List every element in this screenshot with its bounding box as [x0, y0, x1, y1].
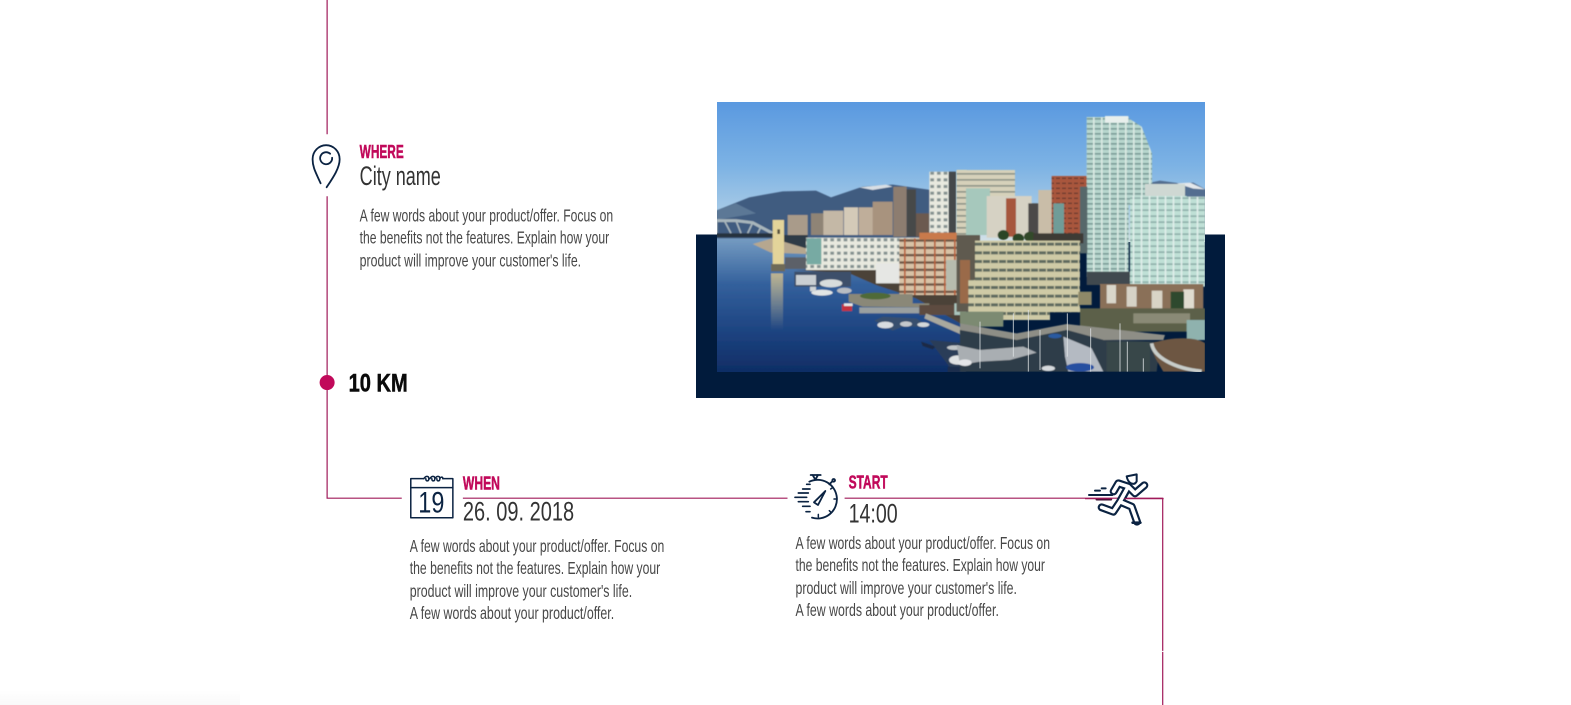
when description: product will improve your customer's life. — [410, 581, 632, 601]
icon: runner — [1085, 474, 1164, 523]
timeline path — [327, 0, 1163, 705]
where description — [360, 205, 613, 270]
photo panel — [696, 102, 1225, 398]
left half of the photo: bridge, water, marina — [716, 170, 967, 377]
when value: 26. 09. 2018 — [463, 497, 574, 527]
distance marker — [320, 370, 408, 398]
icon: stopwatch — [795, 475, 837, 518]
where label: WHERE — [360, 142, 404, 162]
marker dot — [320, 375, 335, 390]
icon: calendar: 19 — [418, 487, 444, 520]
start description: A few words about your product/offer. Focus on — [796, 533, 1050, 553]
start description: product will improve your customer's life. — [796, 578, 1017, 598]
start block — [796, 473, 1050, 620]
when label: WHEN — [463, 474, 500, 494]
when description: the benefits not the features. Explain how your — [410, 558, 660, 578]
when description: A few words about your product/offer. Focus on — [410, 536, 664, 556]
faint bottom-left shading — [0, 690, 240, 705]
when description — [410, 536, 664, 623]
where value: City name — [360, 161, 441, 191]
start description — [796, 533, 1050, 620]
start description: A few words about your product/offer. — [796, 600, 999, 620]
navy backing block — [696, 234, 1225, 398]
timeline and text layer — [313, 0, 1163, 705]
start description: the benefits not the features. Explain how your — [796, 555, 1045, 575]
where block — [360, 142, 613, 270]
right half of the photo: towers, waterfront, yachts — [957, 116, 1207, 372]
icon: location pin — [313, 145, 340, 187]
distance label: 10 KM — [349, 370, 408, 398]
start label: START — [849, 473, 888, 493]
when block — [410, 474, 664, 623]
when description: A few words about your product/offer. — [410, 603, 614, 623]
where description: A few words about your product/offer. Focus on — [360, 205, 613, 225]
city photo illustration — [716, 102, 1207, 377]
icon: calendar — [411, 476, 453, 520]
where description: product will improve your customer's life. — [360, 250, 581, 270]
start value: 14:00 — [849, 499, 898, 529]
where description: the benefits not the features. Explain how your — [360, 227, 609, 247]
